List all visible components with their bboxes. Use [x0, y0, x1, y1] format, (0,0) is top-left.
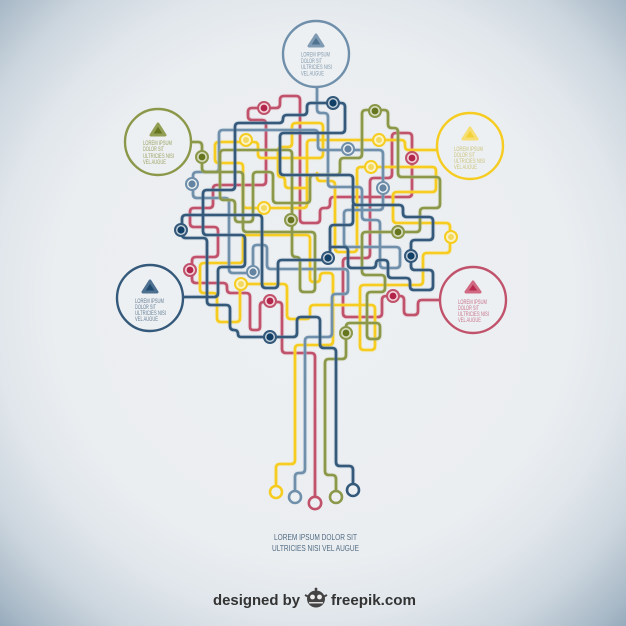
navy nodes	[175, 97, 417, 343]
yellow lines	[200, 123, 450, 486]
yellow nodes	[235, 134, 457, 290]
text: top circle	[301, 52, 332, 78]
text: yellow circle: DOLOR SIT	[454, 152, 475, 159]
text: red circle: VEL AUGUE	[458, 317, 481, 324]
junction nodes	[175, 97, 457, 343]
ring: yellow	[270, 486, 282, 498]
text: olive circle: DOLOR SIT	[143, 146, 164, 153]
text: top circle: DOLOR SIT	[301, 58, 322, 65]
text: navy circle: ULTRICIES NISI	[135, 310, 166, 317]
slate node cores	[188, 145, 387, 276]
icon: navy triangle	[143, 281, 157, 292]
credit: freepik: freepik.com	[331, 593, 416, 609]
icon: red triangle	[466, 282, 480, 292]
text: yellow circle: VEL AUGUE	[454, 164, 477, 171]
text: olive circle: ULTRICIES NISI	[143, 153, 174, 160]
text: red circle: DOLOR SIT	[458, 305, 479, 312]
olive nodes	[196, 105, 404, 339]
red nodes	[184, 102, 418, 307]
text: olive circle: VEL AUGUE	[143, 159, 166, 166]
yellow node cores	[238, 137, 454, 287]
text: yellow circle: LOREM IPSUM	[454, 146, 483, 153]
text: top circle: VEL AUGUE	[301, 70, 324, 78]
olive line	[192, 110, 440, 491]
ring: slate	[289, 491, 301, 503]
panel: olive circle	[125, 109, 191, 175]
ring: red	[309, 497, 321, 509]
text: red circle: ULTRICIES NISI	[458, 311, 489, 318]
navy lines	[182, 103, 433, 483]
text: navy circle: LOREM IPSUM	[135, 298, 164, 305]
text: olive circle: LOREM IPSUM	[143, 140, 172, 147]
text: red circle: LOREM IPSUM	[458, 299, 487, 306]
text: red circle	[458, 299, 489, 324]
slate nodes	[186, 143, 389, 278]
caption: ULTRICIES NISI VEL AUGUE	[272, 543, 359, 553]
text: yellow circle: ULTRICIES NISI	[454, 158, 485, 165]
red node cores	[187, 105, 415, 304]
credit: freepik: designed by	[213, 593, 300, 609]
icon: olive triangle	[151, 124, 165, 135]
icon: freepik robot	[305, 588, 327, 608]
panel: red circle	[440, 267, 506, 333]
panel: navy circle	[117, 265, 183, 331]
trunk end rings	[270, 484, 359, 509]
text: navy circle	[135, 298, 166, 323]
text: yellow circle	[454, 146, 485, 171]
icon: yellow triangle	[463, 128, 477, 139]
text: navy circle: VEL AUGUE	[135, 316, 158, 323]
panel: yellow circle	[437, 113, 503, 179]
icon: slate triangle	[309, 35, 323, 46]
panel: top slate circle	[283, 21, 349, 87]
text: olive circle	[143, 140, 174, 166]
text: top circle: LOREM IPSUM	[301, 52, 330, 58]
olive node cores	[199, 108, 401, 336]
circuit tree lines	[182, 86, 450, 497]
red line	[190, 96, 440, 497]
caption	[272, 532, 359, 553]
caption: LOREM IPSUM DOLOR SIT	[274, 532, 357, 542]
text: navy circle: DOLOR SIT	[135, 304, 156, 311]
slate blue line	[193, 86, 400, 491]
ring: olive	[330, 491, 342, 503]
credit: freepik	[213, 588, 416, 609]
navy node cores	[177, 99, 415, 341]
text: top circle: ULTRICIES NISI	[301, 64, 332, 71]
ring: navy	[347, 484, 359, 496]
